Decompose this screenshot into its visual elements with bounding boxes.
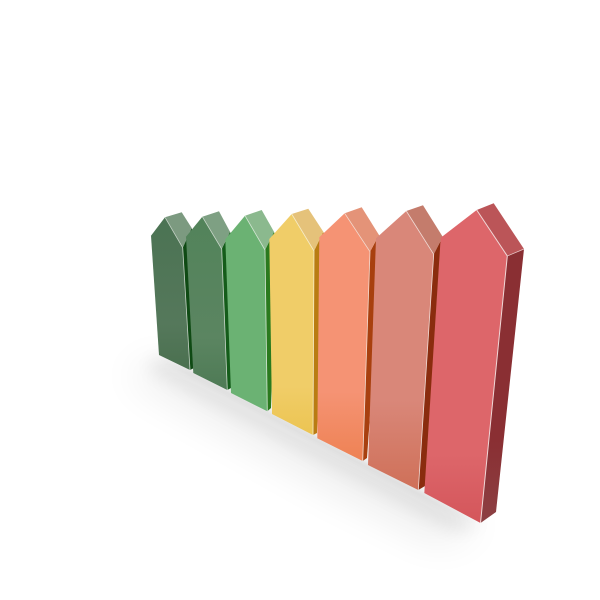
arrow 5: orange — [317, 207, 382, 461]
arrow 3: light green — [225, 210, 276, 411]
arrow 1: dark green — [151, 212, 194, 370]
ground shadow — [125, 356, 482, 545]
arrow 4: yellow — [269, 209, 325, 435]
arrow 2: green — [186, 211, 233, 390]
arrow 7: red — [424, 203, 524, 523]
arrow 6: salmon — [368, 205, 445, 490]
